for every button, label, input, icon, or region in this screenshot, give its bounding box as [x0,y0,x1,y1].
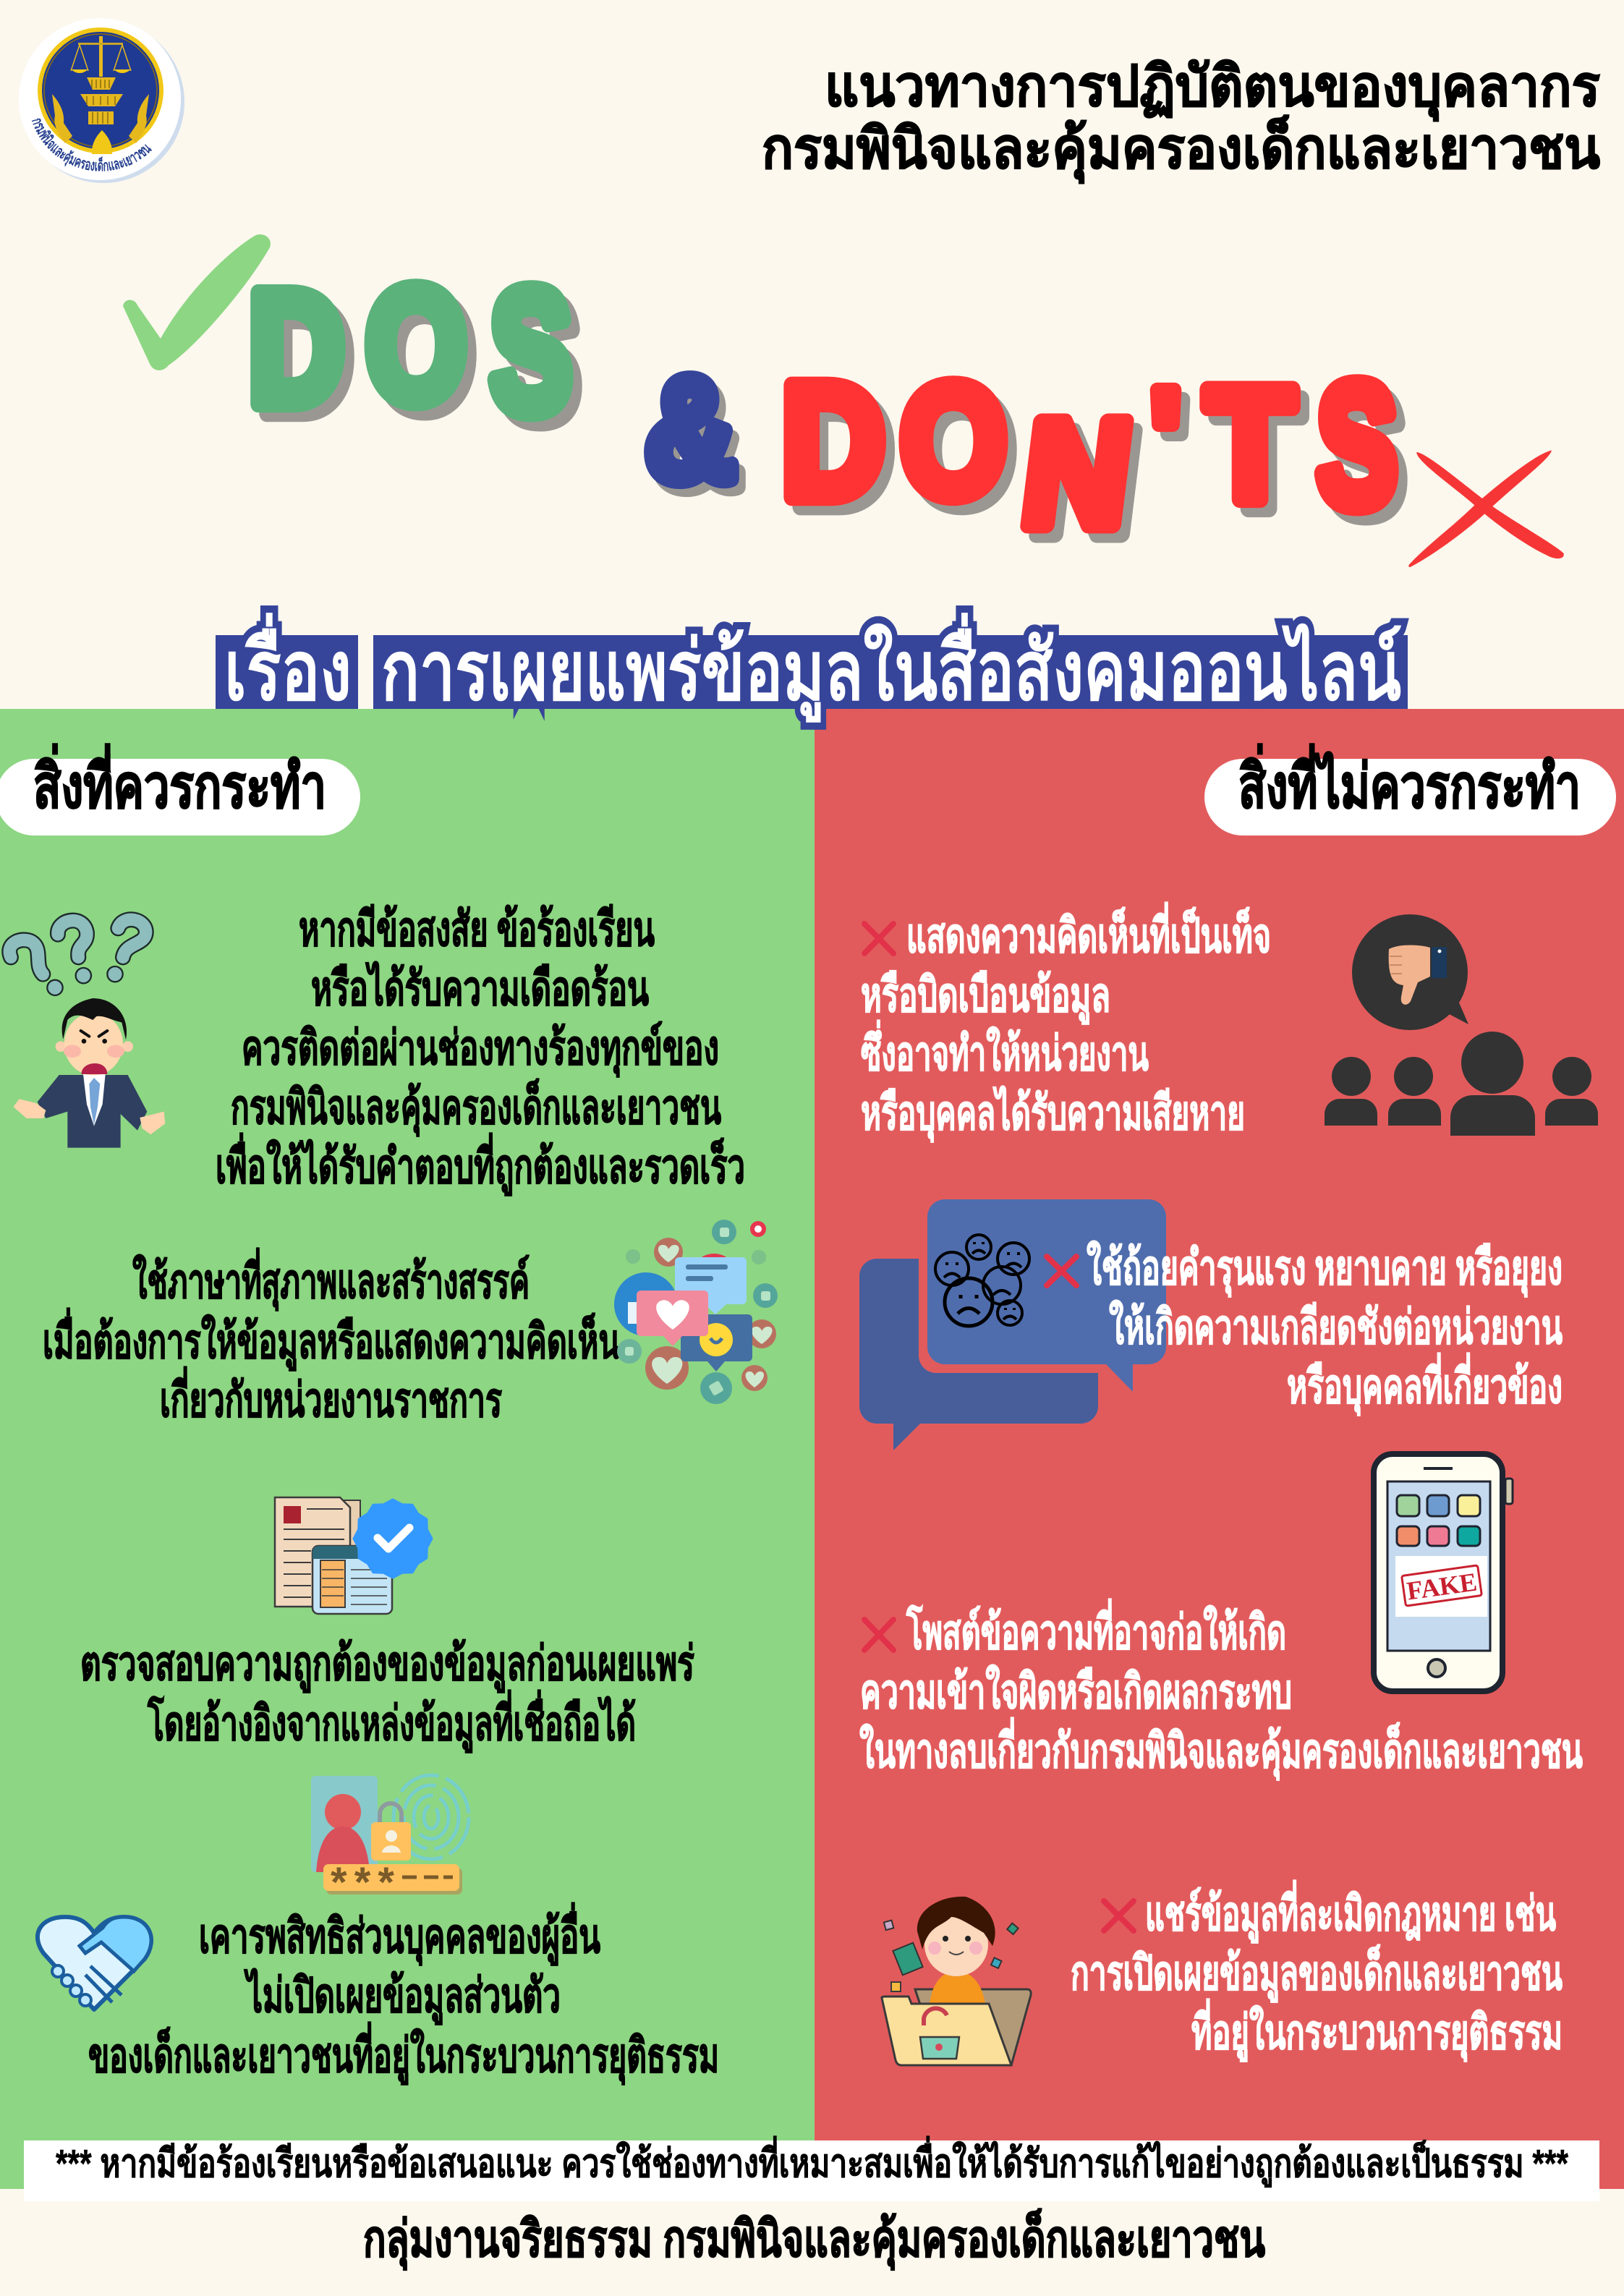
text block: false opinions: ซึ่งอาจทำให้หน่วยงาน [861,1019,1149,1080]
text block: contact through complaint channels: กรมพินิจและคุ้มครองเด็กและเยาวชน [231,1078,721,1137]
text block: contact through complaint channels: เพื่อให้ได้รับคำตอบที่ถูกต้องและรวดเร็ว [216,1132,745,1196]
icon: phone with fake news [1374,1454,1513,1691]
pill heading: things not to do [1204,744,1616,836]
footer: issuing unit: กลุ่มงานจริยธรรม กรมพินิจและคุ้มครองเด็กและเยาวชน [363,2208,1265,2271]
heading: DON'TS [782,348,1397,558]
heading: DON'TS: N [1015,390,1139,558]
icon: cross bullet 2 [1047,1257,1076,1285]
text block: polite language: เมื่อต้องการให้ข้อมูลหรือแสดงความคิดเห็น [43,1307,620,1372]
heading: topic title: เรื่อง [224,613,352,718]
heading: topic title [216,613,1408,723]
icon: handshake heart [38,1917,151,2010]
text block: abusive language [1087,1239,1563,1416]
text block: false opinions: หรือบุคคลได้รับความเสียหาย [861,1085,1245,1143]
icon: sad-face chat bubbles [859,1199,1166,1450]
text block: contact through complaint channels [216,902,745,1196]
heading: DON'TS: ' [1150,361,1181,514]
icon: social media cluster [614,1220,778,1404]
text block: false opinions: แสดงความคิดเห็นที่เป็นเท็จ [906,901,1271,962]
heading: DOS: O [366,254,466,435]
callout: note strip [24,2135,1599,2201]
text block: misleading posts: ความเข้าใจผิดหรือเกิดผลกระทบ [860,1663,1292,1718]
logo: department seal: กรมพินิจและคุ้มครองเด็กและเยาวชน [32,119,152,171]
text block: verify information [80,1636,694,1753]
pill heading: things to do: สิ่งที่ควรกระทำ [33,744,326,820]
pill heading: things to do [0,744,360,836]
text block: respect privacy: ไม่เปิดเผยข้อมูลส่วนตัว [244,1968,561,2025]
heading: DON'TS: T [1206,355,1294,533]
heading: DON'TS: O [901,352,1006,530]
text block: illegal sharing [1071,1879,1563,2062]
icon: cross bullet 3 [864,1620,893,1650]
icon: child with unlocked folder [882,1897,1031,2065]
icon: green check mark [123,234,271,370]
text block: false opinions [861,901,1271,1143]
icon: personal data privacy: *** [331,1859,394,1906]
text block: verify information: ตรวจสอบความถูกต้องของข้อมูลก่อนเผยแพร่ [80,1636,694,1693]
icon: personal data privacy [311,1775,469,1906]
heading: agency guideline title [762,54,1600,184]
heading: DON'TS: D [782,350,885,532]
text block: polite language [43,1247,620,1427]
text block: polite language: ใช้ภาษาที่สุภาพและสร้างสรรค์ [132,1247,530,1311]
icon: verified documents [275,1497,432,1614]
text block: contact through complaint channels: หากมีข้อสงสัย ข้อร้องเรียน [299,902,655,956]
icon: thumbs down audience [1325,914,1598,1136]
text block: polite language: เกี่ยวกับหน่วยงานราชการ [160,1366,502,1427]
heading: DOS [249,253,571,448]
text block: respect privacy [88,1902,719,2085]
text block: respect privacy: ของเด็กและเยาวชนที่อยู่ในกระบวนการยุติธรรม [88,2021,719,2085]
heading: DOS: S [490,253,571,448]
text block: false opinions: หรือบิดเบือนข้อมูล [861,968,1110,1025]
icon: phone with fake news: FAKE [1405,1567,1479,1606]
text block: respect privacy: เคารพสิทธิส่วนบุคคลของผู้อื่น [199,1902,600,1966]
heading: ampersand: & [645,347,736,511]
icon: cross bullet 4 [1104,1901,1134,1931]
panel: green do column [0,709,815,2189]
text block: contact through complaint channels: หรือได้รับความเดือดร้อน [311,961,649,1015]
panel: red don't column [815,709,1624,2189]
logo: department seal [19,18,184,183]
heading: DOS: D [249,259,344,438]
text block: misleading posts: โพสต์ข้อความที่อาจก่อให้เกิด [906,1598,1286,1659]
text block: contact through complaint channels: ควรติดต่อผ่านช่องทางร้องทุกข์ของ [242,1021,719,1078]
icon: cross bullet 1 [864,924,893,953]
text block: misleading posts [859,1598,1583,1781]
text block: verify information: โดยอ้างอิงจากแหล่งข้อมูลที่เชื่อถือได้ [147,1689,636,1753]
icon: large red cross [1408,451,1564,567]
icon: confused man with question marks [9,919,165,1148]
heading: DON'TS: S [1317,348,1397,542]
